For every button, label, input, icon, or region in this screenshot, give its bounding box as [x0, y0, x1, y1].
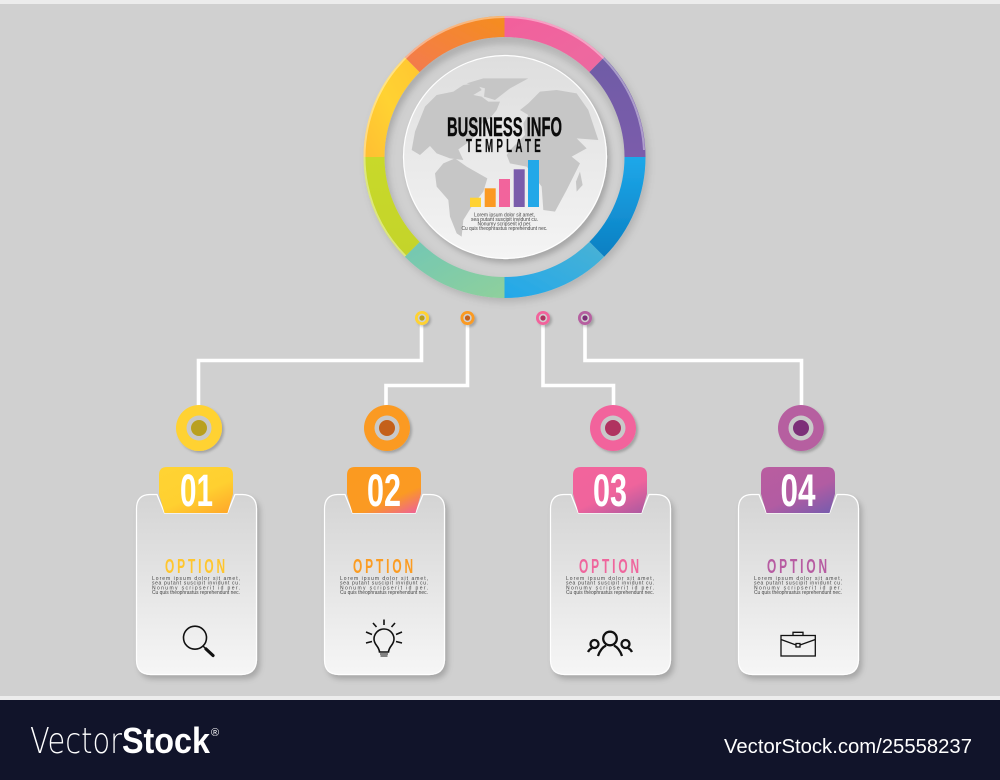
icon: people group: [588, 632, 632, 656]
heading: business info: BUSINESS INFO: [447, 112, 562, 142]
badge 03: [573, 467, 647, 513]
icon: magnifier: [184, 626, 213, 656]
large node 3: [590, 405, 636, 451]
body text: Cu quis theophrastus reprehendunt nec.: [754, 590, 842, 596]
body text: Nonumy scripserit id per.: [340, 585, 428, 591]
badge 04: [761, 467, 835, 513]
small node 2: [460, 311, 474, 325]
body text: Nonumy scripserit id per.: [566, 585, 654, 591]
footer logo: Vector: [30, 721, 122, 762]
world map: [412, 78, 598, 237]
connector line 2: [386, 322, 468, 408]
option label: OPTION: [165, 555, 228, 578]
disc caption text: [462, 213, 548, 232]
body text: sea putant suscipit invidunt cu.: [340, 581, 428, 587]
bar chart: [470, 160, 539, 207]
body text: Nonumy scripserit id per.: [754, 585, 842, 591]
small node 1: [415, 311, 429, 325]
large node 4: [778, 405, 824, 451]
disc caption text: Nonumy scripserit id per.: [478, 221, 532, 227]
option label: OPTION: [767, 555, 830, 578]
icon: briefcase: [781, 632, 815, 656]
footer logo: [30, 720, 219, 762]
footer logo: ®: [211, 727, 219, 739]
large node 2: [364, 405, 410, 451]
body text: [152, 576, 240, 596]
body text: sea putant suscipit invidunt cu.: [152, 581, 240, 587]
small node 3: [536, 311, 550, 325]
body text: Lorem ipsum dolor sit amet,: [566, 576, 654, 582]
central disc: [404, 56, 606, 258]
disc caption text: Cu quis theophrastus reprehendunt nec.: [462, 226, 548, 232]
panel: option card 02: [324, 465, 444, 674]
body text: Nonumy scripserit id per.: [152, 585, 240, 591]
large node 1: [176, 405, 222, 451]
option label: OPTION: [579, 555, 642, 578]
connector line 4: [585, 322, 802, 408]
connector line 1: [198, 322, 422, 408]
body text: Cu quis theophrastus reprehendunt nec.: [152, 590, 240, 596]
badge 02: [347, 467, 421, 513]
disc caption text: Lorem ipsum dolor sit amet,: [474, 213, 535, 219]
panel: option card 01: [136, 465, 256, 674]
body text: Cu quis theophrastus reprehendunt nec.: [566, 590, 654, 596]
ring: eight coloured segments: [364, 16, 646, 298]
option label: OPTION: [353, 555, 416, 578]
number 01: 01: [180, 465, 213, 516]
panel: option card 04: [738, 465, 858, 674]
icon: light bulb: [366, 620, 402, 656]
body text: Lorem ipsum dolor sit amet,: [152, 576, 240, 582]
subheading: template: TEMPLATE: [466, 136, 544, 156]
number 03: 03: [593, 465, 627, 516]
footer logo: Stock: [122, 720, 211, 761]
body text: Lorem ipsum dolor sit amet,: [754, 576, 842, 582]
disc caption text: sea putant suscipit invidunt cu.: [471, 217, 538, 223]
body text: sea putant suscipit invidunt cu.: [754, 581, 842, 587]
body text: [340, 576, 428, 596]
connector line 3: [543, 322, 614, 408]
body text: [566, 576, 654, 596]
body text: sea putant suscipit invidunt cu.: [566, 581, 654, 587]
small node 4: [578, 311, 592, 325]
number 02: 02: [367, 465, 401, 516]
badge 01: [159, 467, 233, 513]
body text: [754, 576, 842, 596]
body text: Lorem ipsum dolor sit amet,: [340, 576, 428, 582]
footer bar: [0, 700, 1000, 780]
footer image id: VectorStock.com/25558237: [724, 736, 972, 758]
panel: option card 03: [550, 465, 670, 674]
body text: Cu quis theophrastus reprehendunt nec.: [340, 590, 428, 596]
number 04: 04: [780, 465, 816, 516]
panel: colour ring and central disc: [364, 16, 646, 298]
